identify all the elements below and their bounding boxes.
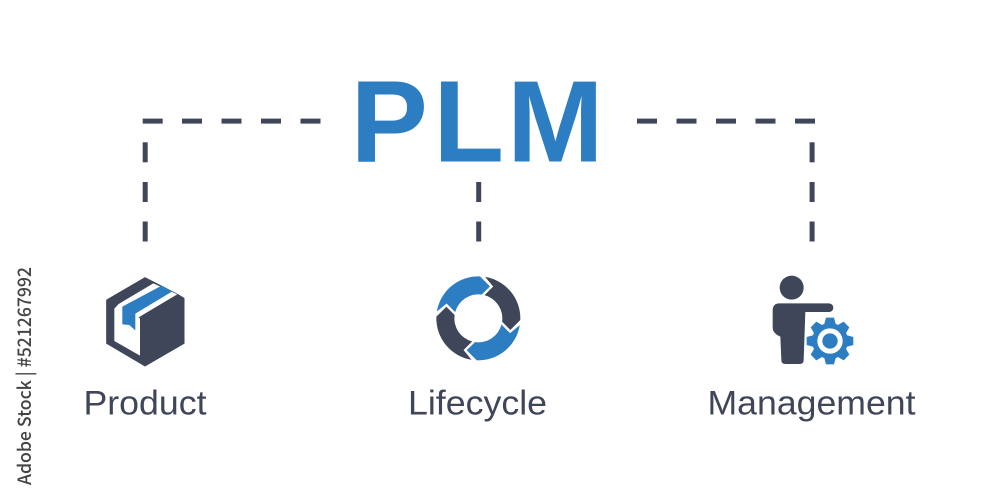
icon: product box [107,278,184,366]
icon: lifecycle ring [436,276,520,360]
dashed connector: right branch [637,119,815,242]
dashed connector: left branch [143,119,320,242]
label: Product: Product [84,384,207,422]
label: Management: Management [708,384,916,422]
dashed connector: centre branch [476,182,481,242]
gear [807,318,853,364]
icon: person with gear [773,276,853,364]
title: PLM: PLM [350,57,604,187]
label: Lifecycle: Lifecycle [408,384,547,422]
side credit text: Adobe Stock | #521267992 [11,267,37,485]
person [773,276,833,364]
